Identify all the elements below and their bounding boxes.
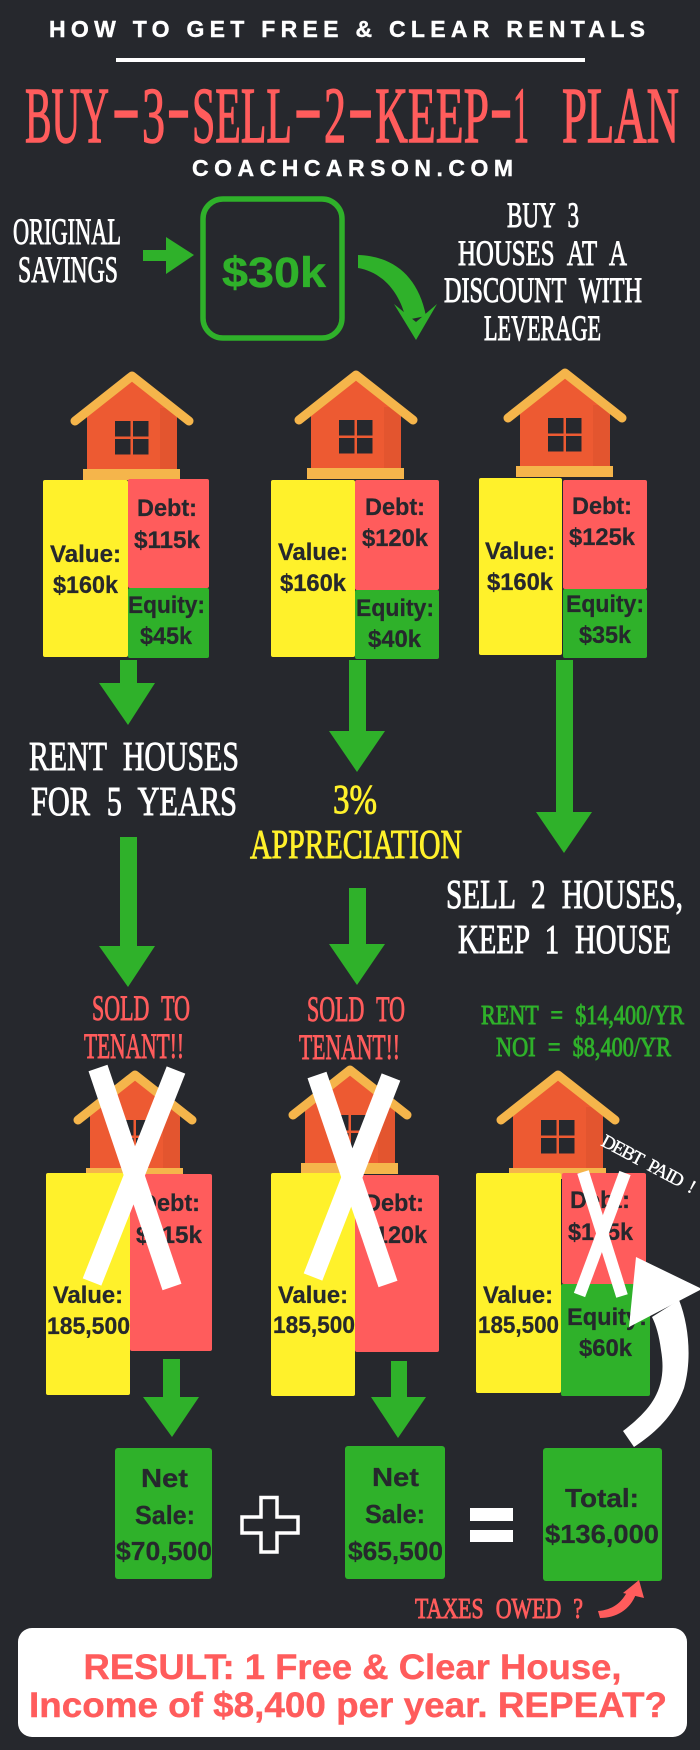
value and debt block 4: Value:: [53, 1282, 123, 1309]
text: 3% appreciation: 3%: [333, 776, 377, 822]
value and debt block 2: $40k: [368, 626, 422, 653]
label: original savings: SAVINGS: [18, 250, 118, 291]
savings box: $30k: [222, 249, 326, 297]
title: -: [167, 64, 190, 151]
value and debt block 4: [46, 1173, 212, 1395]
value and debt block 3: Debt:: [572, 493, 632, 520]
icon: house 4: [78, 1075, 192, 1179]
net sale box 1: $70,500: [116, 1536, 212, 1566]
text: sold to tenant 2: [299, 989, 405, 1067]
value and debt block 2: [271, 480, 439, 659]
text: buy 3 houses: HOUSES AT A: [458, 233, 627, 273]
value and debt block 2: $160k: [280, 570, 347, 597]
icon: house 3: [508, 373, 622, 477]
result callout: [18, 1628, 687, 1737]
text: rent houses for 5 years: FOR 5 YEARS: [31, 778, 237, 824]
text: sold to tenant 2: TENANT!!: [299, 1027, 400, 1067]
white x over paid debt: [580, 1172, 625, 1296]
title: KEEP: [375, 73, 489, 160]
value and debt block 5: 185,500: [273, 1312, 355, 1339]
total box: Total:: [565, 1483, 639, 1513]
title: 3: [142, 73, 165, 160]
value and debt block 3: $125k: [569, 524, 636, 551]
text: 3% appreciation: APPRECIATION: [250, 821, 462, 867]
text: rent houses for 5 years: [29, 733, 239, 824]
arrow: down column 1: [99, 660, 155, 725]
value and debt block 6: [476, 1173, 650, 1396]
value and debt block 4: Debt:: [140, 1190, 200, 1217]
value and debt block 3: Equity:: [566, 591, 644, 618]
plus sign: [242, 1498, 298, 1552]
net sale box 1: [115, 1448, 212, 1579]
heading: how to get free and clear rentals: HOW TO GET FREE & CLEAR RENTALS: [49, 16, 645, 42]
equals sign: [470, 1508, 513, 1542]
title: -: [490, 64, 512, 151]
text: sell 2 houses keep 1 house: [446, 871, 683, 962]
arrow: down column 3: [536, 660, 592, 853]
title: 2: [324, 73, 346, 160]
arrow: down to sold column 1: [99, 837, 155, 987]
value and debt block 6: Value:: [483, 1282, 553, 1309]
website: COACHCARSON.COM: [192, 155, 513, 181]
net sale box 1: Net: [141, 1463, 188, 1493]
title: BUY: [25, 73, 109, 160]
value and debt block 6: Equity:: [567, 1304, 647, 1331]
text: rent houses for 5 years: RENT HOUSES: [29, 733, 239, 779]
value and debt block 4: $115k: [136, 1222, 203, 1249]
label: original savings: [13, 212, 121, 291]
value and debt block 6: $125k: [568, 1219, 634, 1246]
net sale box 2: $65,500: [348, 1536, 443, 1566]
icon: house 2: [299, 375, 413, 479]
value and debt block 5: $120k: [362, 1222, 428, 1249]
value and debt block 1: $160k: [53, 572, 119, 599]
value and debt block 6: 185,500: [478, 1312, 559, 1339]
title: 1: [513, 73, 529, 160]
value and debt block 1: Value:: [50, 541, 121, 568]
value and debt block 2: Equity:: [356, 595, 434, 622]
text: sold to tenant 2: SOLD TO: [307, 989, 405, 1029]
text: sold to tenant 1: [84, 988, 190, 1066]
title: -: [294, 64, 322, 151]
text: buy 3 houses: BUY 3: [507, 195, 579, 235]
total box: $136,000: [545, 1519, 659, 1549]
total box: [543, 1448, 662, 1581]
net sale box 2: [345, 1446, 445, 1579]
arrow: savings to box: [143, 237, 194, 274]
value and debt block 4: 185,500: [47, 1313, 130, 1340]
net sale box 2: Sale:: [365, 1499, 425, 1529]
label: original savings: ORIGINAL: [13, 212, 121, 253]
value and debt block 1: $115k: [134, 527, 201, 554]
text: rent and noi: [481, 1000, 684, 1062]
arrow: down to sold column 2: [329, 888, 385, 985]
savings box: [203, 199, 342, 338]
text: debt paid: DEBT PAID !: [598, 1131, 699, 1198]
value and debt block 1: [43, 479, 209, 658]
arrow: white curved to debt: [623, 1257, 700, 1447]
value and debt block 3: $160k: [487, 569, 554, 596]
value and debt block 2: Value:: [278, 539, 348, 566]
value and debt block 5: Debt:: [364, 1190, 424, 1217]
title: SELL: [192, 73, 292, 160]
net sale box 2: Net: [372, 1462, 419, 1492]
arrow: down to net sale 2: [371, 1361, 426, 1438]
title: -: [348, 64, 373, 151]
arrow: down column 2: [329, 660, 385, 772]
white x over sold house 1: [92, 1068, 176, 1287]
value and debt block 1: Debt:: [137, 495, 197, 522]
arrow: curved down to houses: [358, 255, 437, 340]
value and debt block 3: [479, 478, 647, 658]
value and debt block 1: Equity:: [128, 592, 205, 619]
net sale box 1: Sale:: [135, 1500, 195, 1530]
arrow: down to net sale 1: [143, 1359, 199, 1437]
icon: house 1: [75, 376, 189, 480]
value and debt block 1: $45k: [140, 623, 193, 650]
value and debt block 3: $35k: [579, 622, 632, 649]
value and debt block 3: Value:: [485, 538, 555, 565]
value and debt block 2: Debt:: [365, 494, 425, 521]
icon: house 5: [293, 1070, 407, 1174]
icon: house 6: [501, 1075, 615, 1179]
value and debt block 2: $120k: [362, 525, 429, 552]
result callout: RESULT: 1 Free & Clear House,: [84, 1648, 622, 1687]
white x over sold house 2: [313, 1075, 391, 1284]
value and debt block 6: Debt:: [570, 1187, 630, 1214]
text: 3% appreciation: [250, 776, 462, 867]
text: taxes owed: TAXES OWED ?: [415, 1594, 583, 1625]
result callout: Income of $8,400 per year. REPEAT?: [29, 1686, 667, 1725]
value and debt block 6: $60k: [579, 1335, 633, 1362]
value and debt block 5: Value:: [278, 1282, 348, 1309]
value and debt block 5: [271, 1173, 439, 1396]
text: sold to tenant 1: SOLD TO: [92, 988, 190, 1028]
text: sold to tenant 1: TENANT!!: [84, 1026, 184, 1066]
title: -: [112, 64, 140, 151]
text: buy 3 houses: [444, 195, 642, 348]
arrow: taxes to total: [598, 1580, 644, 1618]
text: buy 3 houses: LEVERAGE: [484, 308, 601, 348]
